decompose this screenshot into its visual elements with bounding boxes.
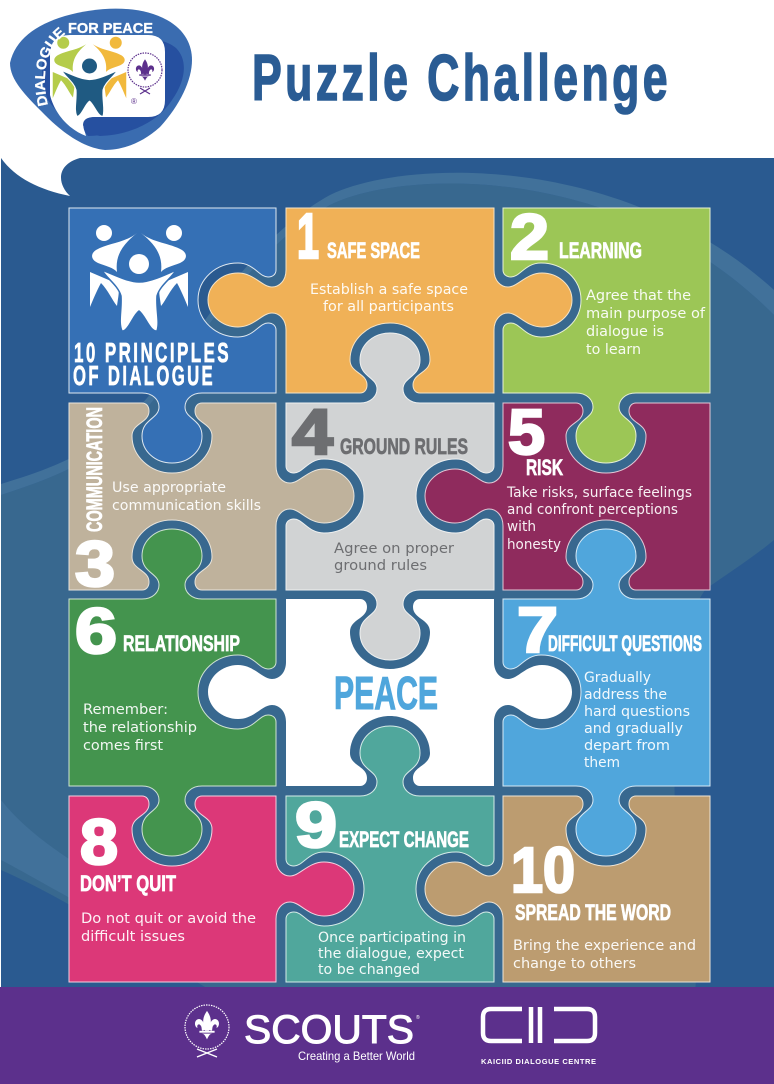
body text <box>584 670 690 771</box>
heading: RELATIONSHIP <box>123 631 240 656</box>
body text: for all participants <box>323 299 454 315</box>
body text: Agree on proper <box>334 541 454 557</box>
heading: SAFE SPACE <box>327 238 420 263</box>
heading: PEACE <box>334 667 438 719</box>
icon: purple scout emblem <box>128 53 162 94</box>
logo: Scouts wordmark: Creating a Better World <box>298 1049 415 1063</box>
icon: three figures <box>53 37 126 116</box>
panel: 10 principles of dialogue <box>69 208 276 463</box>
logo: KAICIID <box>481 1007 596 1066</box>
heading: GROUND RULES <box>340 434 468 459</box>
body text: Gradually <box>584 670 651 686</box>
heading: RISK <box>526 455 563 480</box>
panel: 6 relationship <box>69 529 276 856</box>
logo wording: DIALOGUE <box>35 26 66 106</box>
body text: change to others <box>513 956 636 972</box>
body text: Remember: <box>83 702 168 718</box>
number: 10 <box>511 834 575 906</box>
body text: the dialogue, expect <box>318 946 465 962</box>
body text <box>81 911 256 945</box>
number: 8 <box>80 806 118 878</box>
logo: Dialogue for Peace <box>10 8 192 150</box>
body text: communication skills <box>112 498 261 514</box>
body text: them <box>584 755 620 771</box>
body text: and confront perceptions <box>507 502 678 518</box>
footer band <box>0 987 774 1084</box>
panel: 7 difficult questions <box>503 529 710 856</box>
body text: Take risks, surface feelings <box>506 485 692 501</box>
number: 7 <box>517 594 558 666</box>
body text: honesty <box>507 537 561 553</box>
body text: comes first <box>83 738 164 754</box>
panel: 5 risk <box>425 396 710 590</box>
body text: Once participating in <box>318 930 466 946</box>
body text <box>334 541 454 574</box>
number: 5 <box>508 396 545 468</box>
icon: registered mark: ® <box>131 97 137 106</box>
heading: EXPECT CHANGE <box>339 827 469 852</box>
panel: 10 spread the word <box>425 796 710 982</box>
body text: to be changed <box>318 962 420 978</box>
number: 1 <box>297 200 319 272</box>
heading: SPREAD THE WORD <box>515 900 671 925</box>
number: 6 <box>75 595 117 667</box>
logo: Scouts wordmark: SCOUTS <box>244 1008 414 1052</box>
body text: ground rules <box>334 558 427 574</box>
body text: to learn <box>586 342 641 358</box>
number: 4 <box>292 396 333 468</box>
number: 3 <box>75 528 115 600</box>
body text: address the <box>584 687 667 703</box>
panel: peace <box>208 599 572 786</box>
body text: Do not quit or avoid the <box>81 911 256 927</box>
body text: Establish a safe space <box>310 282 468 298</box>
heading: COMMUNICATION <box>82 407 107 532</box>
panel: 1 safe space <box>208 200 572 393</box>
body text: and gradually <box>584 721 683 737</box>
heading: LEARNING <box>559 238 642 263</box>
body text: difficult issues <box>81 929 185 945</box>
body text <box>506 485 692 553</box>
body text: hard questions <box>584 704 690 720</box>
body text: dialogue is <box>586 324 664 340</box>
body text <box>586 288 706 358</box>
number: 9 <box>295 789 337 861</box>
body text: Use appropriate <box>112 480 226 496</box>
heading <box>73 337 231 391</box>
body text <box>318 930 466 978</box>
panel: 2 learning <box>503 201 710 463</box>
logo: KAICIID: KAICIID DIALOGUE CENTRE <box>481 1057 596 1066</box>
body text: Bring the experience and <box>513 938 696 954</box>
body text <box>83 702 197 754</box>
body text <box>513 938 696 972</box>
number: 2 <box>510 201 549 273</box>
panel: 4 ground rules <box>286 333 494 660</box>
body text: Agree that the <box>586 288 691 304</box>
logo: Scouts wordmark: ® <box>416 1014 420 1021</box>
heading: OF DIALOGUE <box>73 360 215 391</box>
panel: 9 expect change <box>286 726 494 982</box>
logo wording: FOR PEACE <box>68 20 153 37</box>
panel: 3 communication <box>69 403 354 600</box>
body text <box>112 480 261 514</box>
body text: main purpose of <box>586 306 706 322</box>
heading: DON’T QUIT <box>80 871 176 896</box>
body text: with <box>507 519 536 535</box>
body text: depart from <box>584 738 670 754</box>
blue speech-bubble background <box>1 158 774 990</box>
logo: Scouts emblem <box>185 1005 229 1057</box>
logo wording <box>35 20 153 106</box>
body text: the relationship <box>83 720 197 736</box>
icon: three people <box>90 225 188 331</box>
panel: 8 don't quit <box>69 796 354 982</box>
heading: 10 PRINCIPLES <box>74 337 231 368</box>
body text <box>310 282 468 315</box>
